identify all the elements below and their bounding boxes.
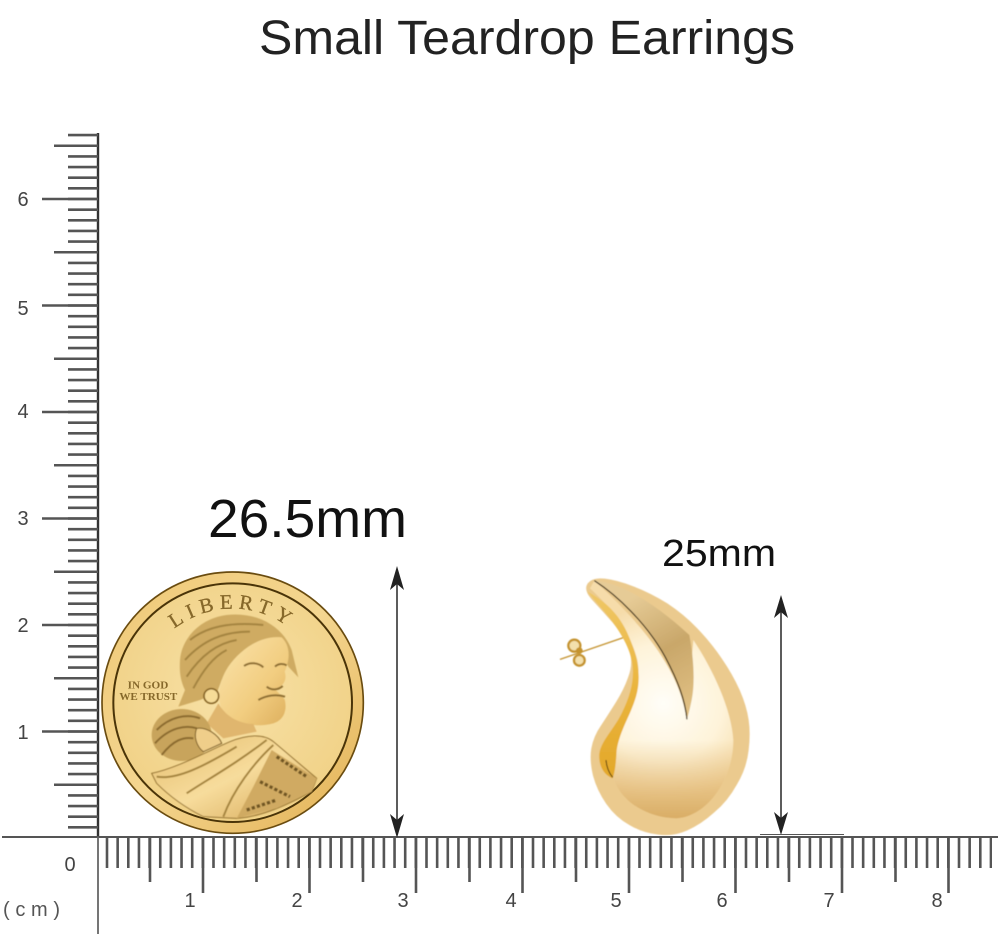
horizontal ruler numbers: 8 [931, 890, 943, 912]
horizontal ruler numbers: 4 [505, 890, 517, 912]
coin lettering: WE TRUST [119, 692, 177, 703]
horizontal ruler numbers: 5 [610, 890, 622, 912]
title: Small Teardrop Earrings [259, 12, 795, 65]
coin height arrow [390, 566, 404, 838]
coin [101, 571, 364, 834]
earring [560, 578, 750, 835]
vertical ruler numbers: 4 [17, 401, 29, 423]
unit label: (cm) [3, 899, 60, 921]
earring post and back [560, 637, 624, 666]
horizontal ruler numbers: 2 [291, 890, 303, 912]
earring size label: 25mm [662, 533, 776, 575]
vertical ruler numbers: 2 [17, 615, 29, 637]
horizontal ruler numbers: 0 [64, 854, 76, 876]
vertical ruler [17, 133, 98, 838]
earring inner fold [587, 592, 639, 778]
coin lettering: IN GOD [128, 680, 168, 691]
horizontal ruler [2, 837, 998, 934]
vertical ruler numbers: 6 [17, 189, 29, 211]
vertical ruler numbers: 1 [17, 722, 29, 744]
coin lettering: LIBERTY [167, 594, 294, 628]
earring height arrow [760, 595, 844, 835]
horizontal ruler numbers: 3 [397, 890, 409, 912]
horizontal ruler numbers: 6 [716, 890, 728, 912]
vertical ruler numbers [17, 189, 29, 744]
vertical ruler numbers: 3 [17, 508, 29, 530]
coin size label: 26.5mm [208, 489, 407, 549]
horizontal ruler numbers: 7 [823, 890, 835, 912]
horizontal ruler numbers [64, 854, 943, 912]
horizontal ruler numbers: 1 [184, 890, 196, 912]
coin lettering [119, 594, 294, 703]
portrait [152, 614, 317, 818]
vertical ruler numbers: 5 [17, 298, 29, 320]
